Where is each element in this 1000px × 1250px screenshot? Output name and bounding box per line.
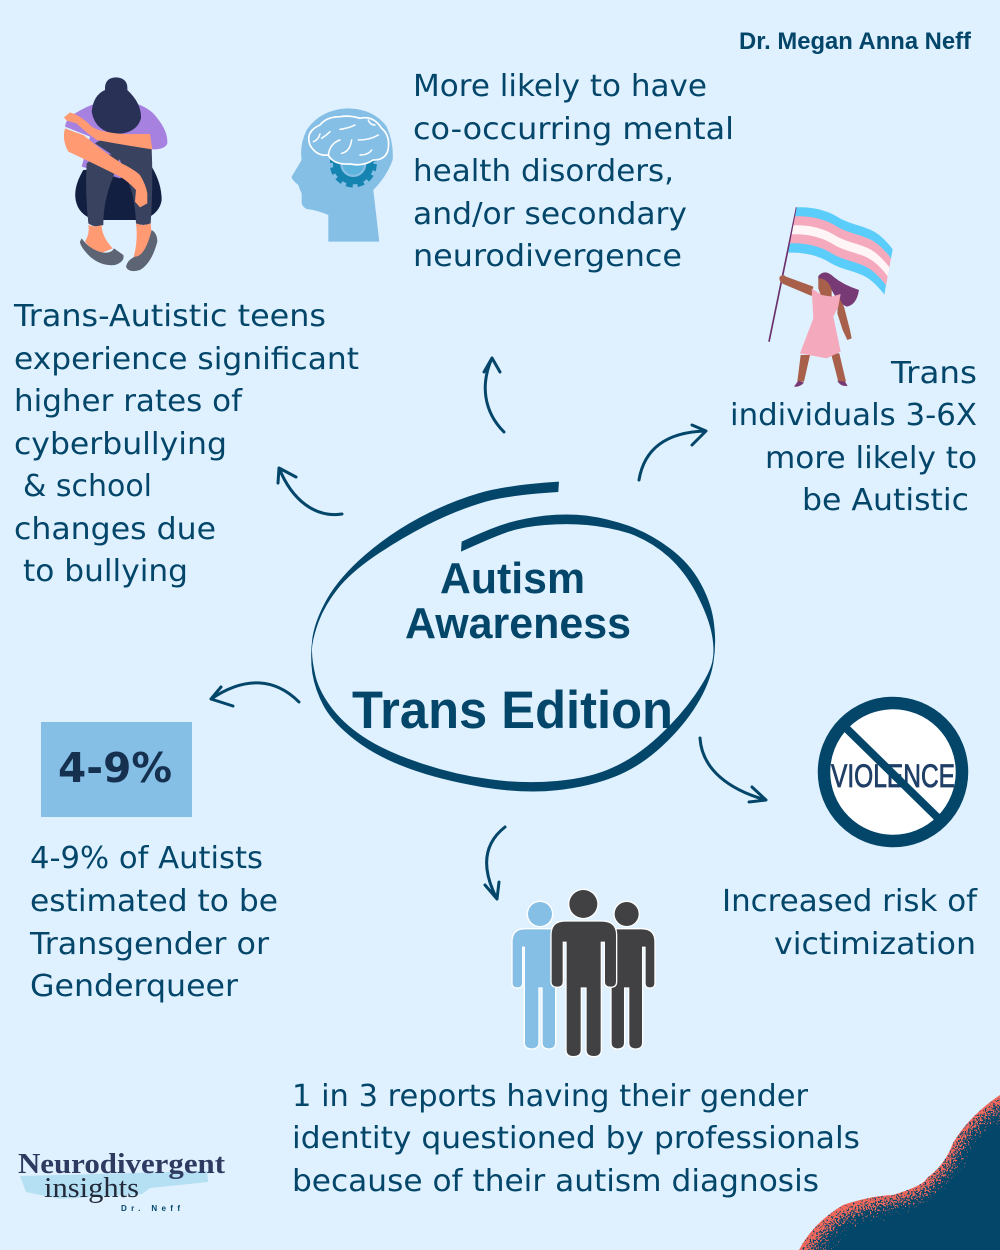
- text: co-occurring disorders: neurodivergence: [413, 239, 682, 274]
- decorative corner blob: [790, 1090, 1000, 1250]
- text: gender identity questioned: [292, 1079, 860, 1199]
- text: autists estimate: Transgender or: [29, 927, 270, 962]
- text: gender identity questioned: 1 in 3 reports having their gender: [292, 1079, 809, 1114]
- icon: head with brain and gear: [292, 108, 393, 242]
- arrow: to flag: [639, 425, 706, 480]
- central ellipse scribble: [311, 482, 715, 792]
- text: autists estimate: 4-9% of Autists: [30, 841, 263, 876]
- logo: Neurodivergent insights: Dr. Neff: [121, 1204, 180, 1213]
- title: Autism Awareness Trans Edition: Awareness: [405, 599, 631, 648]
- text: co-occurring disorders: co-occurring mental: [413, 112, 734, 147]
- arrow: to brain: [484, 358, 504, 432]
- arrow: to people icon: [485, 827, 505, 899]
- author credit: Dr. Megan Anna Neff: [739, 28, 972, 55]
- text: victimization: victimization: [774, 927, 976, 962]
- icon: three people: [513, 890, 654, 1056]
- text: cyberbullying: & school: [23, 469, 152, 504]
- text: trans individuals statistic: Trans: [890, 356, 977, 391]
- text: cyberbullying: [13, 299, 359, 589]
- logo: Neurodivergent insights: insights: [44, 1172, 139, 1204]
- text: gender identity questioned: because of their autism diagnosis: [292, 1164, 819, 1199]
- text: cyberbullying: cyberbullying: [14, 427, 227, 462]
- stat box: 4-9%: [41, 722, 192, 817]
- icon: no violence sign: [824, 703, 962, 841]
- text: gender identity questioned: identity questioned by professionals: [292, 1121, 860, 1156]
- text: victimization: [722, 884, 978, 962]
- title: Autism Awareness Trans Edition: Autism: [440, 554, 585, 603]
- text: cyberbullying: experience significant: [14, 342, 359, 377]
- logo: Neurodivergent insights: Neurodivergent: [18, 1148, 225, 1180]
- text: co-occurring disorders: More likely to have: [413, 69, 707, 104]
- text: autists estimate: [29, 841, 278, 1004]
- icon: person sitting hugging knees: [64, 77, 167, 271]
- arrow: to cyberbullying: [278, 468, 342, 515]
- text: co-occurring disorders: and/or secondary: [413, 197, 687, 232]
- text: cyberbullying: Trans-Autistic teens: [13, 299, 326, 334]
- text: trans individuals statistic: more likely to: [765, 441, 977, 476]
- icon: woman holding transgender flag: [769, 207, 893, 387]
- text: victimization: Increased risk of: [722, 884, 978, 919]
- text: co-occurring disorders: health disorders,: [413, 154, 674, 189]
- text: autists estimate: Genderqueer: [30, 969, 239, 1004]
- icon: no violence sign: VIOLENCE: [831, 758, 955, 794]
- text: trans individuals statistic: individuals 3-6X: [730, 398, 977, 433]
- text: cyberbullying: to bullying: [23, 554, 188, 589]
- text: co-occurring disorders: [413, 69, 734, 274]
- logo: Neurodivergent insights: [18, 1148, 225, 1213]
- title: Autism Awareness Trans Edition: [352, 554, 673, 740]
- stat box: 4-9%: 4-9%: [58, 744, 172, 792]
- text: trans individuals statistic: [730, 356, 977, 518]
- arrow: to percentage box: [211, 683, 299, 706]
- title: Autism Awareness Trans Edition: Trans Edition: [352, 681, 673, 740]
- text: cyberbullying: higher rates of: [14, 384, 243, 419]
- text: autists estimate: estimated to be: [30, 884, 278, 919]
- text: trans individuals statistic: be Autistic: [802, 483, 969, 518]
- arrow: to violence icon: [700, 738, 766, 802]
- text: cyberbullying: changes due: [14, 512, 216, 547]
